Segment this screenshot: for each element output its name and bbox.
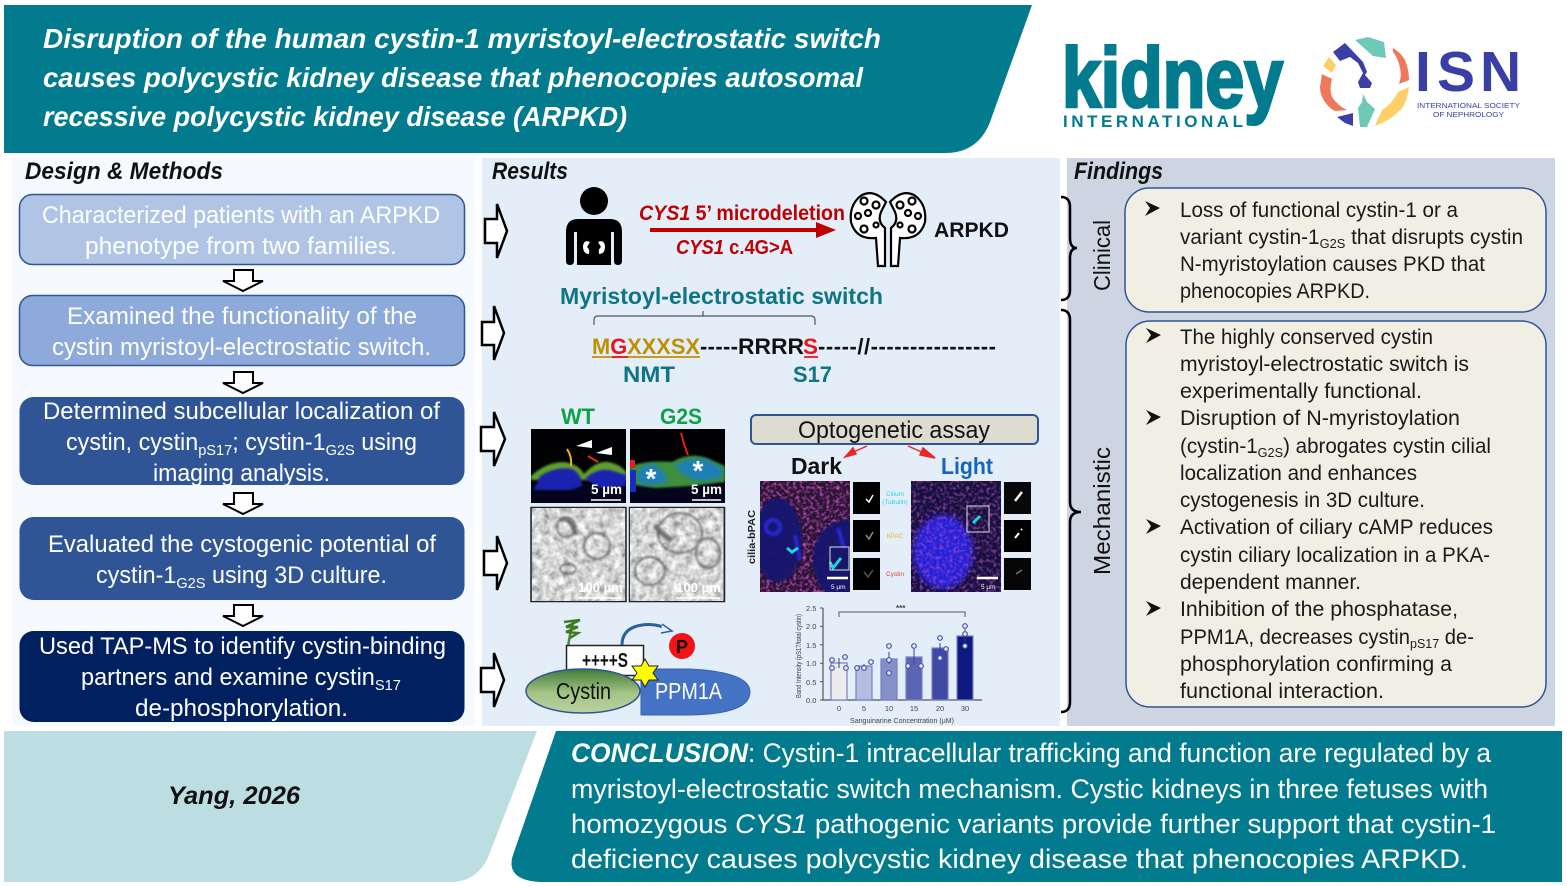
logo: Kidney International: INTERNATIONAL [1063,112,1243,131]
finding box: mechanistic: (cystin-1 [1180,435,1259,458]
citation panel [4,731,537,882]
protein sequence: S [803,334,818,359]
genetic variants arrow: CYS1 5’ microdeletion [639,202,845,225]
method step 1: Characterized patients with an ARPKD [42,202,440,229]
arrows from methods to results [481,204,507,707]
method step 4 [20,517,464,600]
heading: Results: Results [492,158,568,185]
title banner: causes polycystic kidney disease that phenocopies autosomal [43,62,864,93]
bar chart: band intensity vs sanguinarine concentration: Sanguinarine Concentration (µM) [850,716,954,725]
conclusion panel: myristoyl-electrostatic switch mechanism. Cystic kidneys in three fetuses with [571,774,1488,804]
label: ARPKD: ARPKD [934,219,1009,242]
finding box: mechanistic: cystogenesis in 3D culture. [1180,489,1425,512]
micrograph: Dark cilia [760,481,850,592]
icon: polycystic kidneys [851,193,925,266]
method step 1 [20,194,464,264]
method step 3: Determined subcellular localization of [43,398,440,425]
finding box: clinical: phenocopies ARPKD. [1180,280,1370,303]
Cystin PPM1A diagram: PPM1A [655,678,723,704]
Optogenetic assay label: Optogenetic assay [798,417,990,444]
label: G2S: G2S [660,404,702,429]
brace: Mechanistic [1061,310,1081,712]
panel: Findings [1061,158,1555,726]
title banner [4,5,1032,153]
micrograph: Light cilia: 5 µm [981,584,996,591]
bar chart: band intensity vs sanguinarine concentration: 20 [936,704,944,713]
bar chart: band intensity vs sanguinarine concentration [794,604,982,725]
finding box: mechanistic: ) abrogates cystin cilial [1283,435,1491,458]
heading: Findings: Findings [1074,158,1163,185]
conclusion panel: homozygous CYS1 pathogenic variants provide further support that cystin-1 [571,809,1496,839]
bar chart: band intensity vs sanguinarine concentration: 2.0 [806,622,816,631]
legend: channel names: (Tubulin) [882,499,908,506]
finding box: mechanistic [1126,321,1546,707]
heading: Design and Methods: Design & Methods [25,158,223,185]
label: Mechanistic: Mechanistic [1089,447,1115,575]
finding box: mechanistic: phosphorylation confirming a [1180,653,1452,676]
finding box: mechanistic: Disruption of N-myristoylation [1180,407,1460,430]
finding box: mechanistic: pS17 [1410,636,1439,651]
finding box: clinical: that disrupts cystin [1345,226,1523,249]
method step 2: cystin myristoyl-electrostatic switch. [52,334,431,361]
label: Dark: Dark [791,453,842,479]
logo: ISN [1320,37,1521,127]
method step 3: pS17 [198,442,232,459]
micrograph: G2S fluorescence [630,428,725,503]
micrograph: G2S 3D culture: 100 µm [676,580,721,595]
bar chart: band intensity vs sanguinarine concentration: 2.5 [806,604,816,613]
finding box: clinical: G2S [1320,236,1346,251]
bar chart: band intensity vs sanguinarine concentration: 1.5 [806,641,816,650]
logo: ISN: INTERNATIONAL SOCIETY [1417,101,1520,110]
bar chart: band intensity vs sanguinarine concentration: 5 [862,704,866,713]
bar chart: band intensity vs sanguinarine concentration: 0.5 [806,678,816,687]
legend: channel names: Cystin [886,571,904,578]
method step 2: Examined the functionality of the [67,303,417,330]
method step 4: cystin-1 [96,562,179,589]
Cystin PPM1A diagram: ++++S [582,650,628,672]
finding box: clinical: N-myristoylation causes PKD that [1180,253,1485,276]
label: Clinical: Clinical [1089,220,1115,291]
method step 1: phenotype from two families. [85,233,397,260]
finding box: clinical: Loss of functional cystin-1 or a [1180,199,1458,222]
Cystin PPM1A diagram [526,620,750,715]
protein sequence [592,334,996,359]
thumbnails: Light channels [1004,482,1031,590]
micrograph: WT 3D culture [531,508,626,602]
protein sequence: MGXXXSX [592,334,700,359]
bar chart: band intensity vs sanguinarine concentration: 10 [885,704,893,713]
method step 3: ; cystin-1 [232,429,326,456]
bar chart: band intensity vs sanguinarine concentration: 1.0 [806,659,816,668]
finding box: mechanistic: G2S [1258,445,1283,460]
brace: Clinical [1061,197,1077,300]
micrograph: G2S 3D culture [630,508,724,602]
title banner: Disruption of the human cystin-1 myristoyl-electrostatic switch [43,23,881,54]
title banner: recessive polycystic kidney disease (ARPKD) [43,101,627,132]
method step 3: G2S [326,442,355,459]
method step 3: imaging analysis. [153,460,330,487]
legend: channel names: Cilium [886,491,904,498]
method step 4: G2S [176,575,206,592]
finding box: mechanistic: de- [1439,626,1474,649]
protein sequence: RRRR [738,334,804,359]
panel: Results [481,158,1060,726]
method step 4: using 3D culture. [206,562,387,589]
Optogenetic assay label [751,415,1038,444]
icon: patient with kidneys [566,187,622,265]
label: WT: WT [561,404,596,429]
panel: Design and Methods [12,158,475,726]
finding box: clinical: variant cystin-1 [1180,226,1321,249]
conclusion panel: CONCLUSION: Cystin-1 intracellular trafficking and function are regulated by a [571,738,1492,768]
citation panel: Yang, 2026 [168,782,301,810]
bar chart: band intensity vs sanguinarine concentration: Band Intensity (pS17/total cystin) [794,614,803,698]
micrograph: WT fluorescence [531,428,626,503]
label: cilia-bPAC: cilia-bPAC [747,510,758,564]
protein sequence: -----//---------------- [818,334,996,359]
genetic variants arrow [639,202,845,259]
finding box: mechanistic: Inhibition of the phosphatase, [1180,598,1458,621]
method step 4: Evaluated the cystogenic potential of [48,531,436,558]
genetic variants arrow: CYS1 c.4G>A [676,237,793,259]
bracket [594,311,815,325]
finding box: mechanistic: localization and enhances [1180,462,1417,485]
bar chart: band intensity vs sanguinarine concentration: 0 [837,704,841,713]
method step 5: partners and examine cystin [81,664,381,691]
conclusion panel: deficiency causes polycystic kidney disease that phenocopies ARPKD. [571,844,1468,874]
finding box: mechanistic: cystin ciliary localization in a PKA- [1180,544,1490,567]
micrograph: WT fluorescence: 5 µm [591,481,622,497]
bar chart: band intensity vs sanguinarine concentration: 30 [961,704,969,713]
arrows between method steps [223,270,263,626]
method step 3: cystin, cystin [66,429,202,456]
finding box: mechanistic: dependent manner. [1180,571,1361,594]
logo: ISN: OF NEPHROLOGY [1433,110,1504,119]
method step 5: Used TAP-MS to identify cystin-binding [39,633,446,660]
legend: channel names [882,491,908,578]
method step 5: de-phosphorylation. [135,695,348,722]
micrograph: Dark cilia: 5 µm [831,584,846,591]
micrograph: G2S fluorescence: * [693,455,704,486]
finding box: mechanistic: PPM1A, decreases cystin [1180,626,1419,649]
conclusion panel [512,731,1562,882]
Cystin PPM1A diagram: Cystin [556,678,611,704]
method step 3: using [355,429,417,456]
finding box: clinical [1125,188,1546,312]
logo: Kidney International: kidney [1062,31,1283,125]
method step 5 [20,631,464,722]
protein sequence: ----- [700,334,738,359]
finding box: mechanistic: functional interaction. [1180,680,1384,703]
bar chart: band intensity vs sanguinarine concentration: 0.0 [806,696,816,705]
legend: channel names: bPAC [887,533,904,540]
finding box: mechanistic: myristoyl-electrostatic switch is [1180,353,1469,376]
micrograph: G2S fluorescence: 5 µm [691,481,722,497]
thumbnails: Dark channels [853,482,880,590]
finding box: mechanistic: Activation of ciliary cAMP reduces [1180,516,1493,539]
micrograph: G2S fluorescence: * [646,463,657,494]
micrograph: WT 3D culture: 100 µm [578,580,623,595]
label: S17: S17 [793,362,832,387]
Cystin PPM1A diagram: P [676,637,688,657]
label: NMT: NMT [623,362,676,387]
red arrows to Dark and Light [845,446,935,458]
logo: ISN: ISN [1415,40,1521,104]
micrograph: Light cilia [911,481,1001,592]
bar chart: band intensity vs sanguinarine concentration: *** [896,604,906,613]
heading: Myristoyl-electrostatic switch: Myristoyl-electrostatic switch [560,283,883,309]
method step 2 [20,296,464,366]
bar chart: band intensity vs sanguinarine concentration: 15 [910,704,918,713]
method step 3 [20,397,464,487]
label: Light: Light [941,453,993,479]
finding box: mechanistic: experimentally functional. [1180,380,1422,403]
finding box: mechanistic: The highly conserved cystin [1180,326,1433,349]
method step 5: S17 [375,677,401,694]
